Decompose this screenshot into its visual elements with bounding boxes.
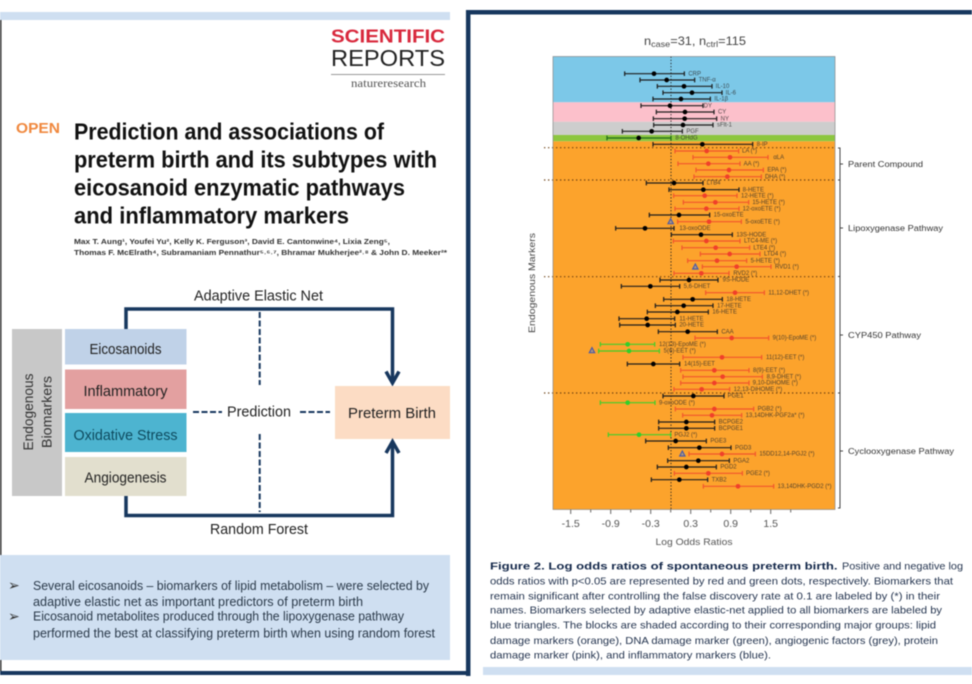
open access tag: OPEN <box>16 121 60 137</box>
lipoxygenase pathway markers: 15-HETE (*) <box>752 200 785 206</box>
bullet: lipoxygenase finding: performed the best at classifying preterm birth when using random forest <box>33 627 436 641</box>
box: preterm birth: Preterm Birth <box>348 406 436 422</box>
box: inflammatory <box>65 370 186 409</box>
lipoxygenase pathway markers <box>616 181 799 277</box>
box: preterm birth <box>335 386 450 439</box>
CYP450 pathway markers: 5,6-DHET <box>684 284 711 290</box>
chart heading: sample sizes: n <box>644 34 651 48</box>
pathway bracket and labels: CYP450 Pathway <box>848 330 922 340</box>
CYP450 pathway markers: 20-HETE <box>679 323 704 329</box>
DNA damage marker <box>607 136 698 142</box>
CYP450 pathway markers <box>589 278 816 393</box>
figure caption: Figure 2. Log odds ratios of spontaneous preterm birth. <box>490 560 838 572</box>
CYP450 pathway markers: 17-HETE <box>717 303 742 309</box>
lipoxygenase pathway markers: 12-HETE (*) <box>741 193 774 199</box>
lipoxygenase pathway markers: LTC4-ME (*) <box>744 239 777 245</box>
CYP450 pathway markers: 14(15)-EET <box>684 362 715 368</box>
figure caption: blue triangles. The blocks are shaded according to their corresponding major groups: lipid <box>490 619 936 631</box>
arrow: adaptive elastic net path to preterm birth <box>126 309 399 383</box>
x axis: -0.9 <box>602 518 620 530</box>
parent compound markers: DHA (*) <box>765 174 785 180</box>
chart heading: sample sizes: =31, n <box>670 34 706 48</box>
bullet: eicosanoids finding: Several eicosanoids – biomarkers of lipid metabolism – were selected by <box>33 579 430 593</box>
CYP450 pathway markers: 12,13-DiHOME (*) <box>734 387 782 393</box>
cyclooxygenase pathway markers: PGA2 <box>733 458 750 464</box>
parent compound markers: LA (*) <box>742 149 757 155</box>
figure caption: Positive and negative log <box>842 560 963 572</box>
parent compound markers: αLA <box>773 155 784 161</box>
flow diagram <box>12 289 450 538</box>
cyclooxygenase pathway markers: PGE3 <box>710 439 727 445</box>
box: inflammatory: Inflammatory <box>84 384 168 400</box>
panel: endogenous biomarkers: Endogenous <box>20 374 36 450</box>
cyclooxygenase pathway markers: 9-oxoODE (*) <box>659 400 695 406</box>
prediction label with dashed guides: Prediction <box>227 405 291 421</box>
parent compound markers: 8-IP <box>757 142 768 148</box>
x axis <box>562 510 791 530</box>
cyclooxygenase pathway markers: BCPGE1 <box>719 426 744 432</box>
box: oxidative stress <box>65 413 186 452</box>
CYP450 pathway markers: 11(12)-EET (*) <box>766 355 804 361</box>
CYP450 pathway markers: 9S-HODE <box>723 278 749 284</box>
figure caption: names. Biomarkers selected by adaptive elastic-net applied to all biomarkers are labeled by <box>490 604 943 616</box>
protein damage markers <box>641 103 729 122</box>
figure caption <box>490 560 963 661</box>
parent compound markers <box>653 142 787 180</box>
bullet: eicosanoids finding: adaptive elastic net as important predictors of preterm birth <box>33 595 363 609</box>
label: adaptive elastic net: Adaptive Elastic Net <box>194 289 323 305</box>
cyclooxygenase pathway markers: PGJ2 (*) <box>674 432 697 438</box>
cyclooxygenase pathway markers: PGB2 (*) <box>758 407 782 413</box>
cyclooxygenase pathway markers: 13,14DHK-PGD2 (*) <box>778 484 832 490</box>
figure caption: damage markers (orange), DNA damage marker (green), angiogenic factors (grey), protein <box>490 635 938 647</box>
journal logo: Scientific Reports <box>331 26 445 90</box>
parent compound markers: EPA (*) <box>767 168 787 174</box>
figure caption: damage marker (pink), and inflammatory markers (blue). <box>490 649 771 661</box>
cyclooxygenase pathway markers: PGE1 <box>728 394 744 400</box>
figure caption: remain significant after controlling the false discovery rate at 0.1 are labeled by (*) in their <box>490 590 941 602</box>
journal logo: Scientific Reports: SCIENTIFIC <box>331 26 445 47</box>
CYP450 pathway markers: 11,12-DHET (*) <box>768 290 809 296</box>
bullet: eicosanoids finding <box>8 578 430 609</box>
lipoxygenase pathway markers: 15-oxoETE <box>714 213 744 219</box>
CYP450 pathway markers: 5(6)-EET (*) <box>664 349 696 355</box>
lipoxygenase pathway markers: 8-HETE <box>743 187 764 193</box>
bullet: lipoxygenase finding <box>8 609 436 641</box>
CYP450 pathway markers: 16-HETE <box>712 310 737 316</box>
title: preterm birth and its subtypes with <box>74 147 437 173</box>
angiogenic factors: PGF <box>686 129 699 135</box>
cyclooxygenase pathway markers: 13,14DHK-PGF2a* (*) <box>746 413 805 419</box>
forest plot <box>544 56 835 510</box>
x axis: 0.9 <box>723 518 738 530</box>
cyclooxygenase pathway markers: TXB2 <box>712 477 727 483</box>
CYP450 pathway markers: 9(10)-EpoME (*) <box>773 336 816 342</box>
bullet: eicosanoids finding: ➢ <box>8 578 20 594</box>
panel: endogenous biomarkers <box>12 329 62 496</box>
y axis label: Endogenous Markers <box>527 232 537 333</box>
box: angiogenesis: Angiogenesis <box>84 471 166 487</box>
cyclooxygenase pathway markers: PGD2 <box>720 465 737 471</box>
journal logo: Scientific Reports: natureresearch <box>351 76 426 90</box>
angiogenic factors <box>622 123 733 135</box>
cyclooxygenase pathway markers: BCPGE2 <box>719 420 744 426</box>
protein damage markers: DY <box>704 103 712 109</box>
authors <box>74 239 447 257</box>
DNA damage marker: 8-OHdG <box>675 136 698 142</box>
inflammatory markers: CRP <box>688 71 701 77</box>
inflammatory markers <box>625 71 737 103</box>
prediction label with dashed guides <box>193 312 330 512</box>
x axis: 1.5 <box>763 518 778 530</box>
lipoxygenase pathway markers: 5-HETE (*) <box>751 258 780 264</box>
title: Prediction and associations of <box>74 118 384 144</box>
x axis label: Log Odds Ratios <box>656 537 733 548</box>
inflammatory markers: TNF-α <box>699 78 716 84</box>
cyclooxygenase pathway markers: PGE2 (*) <box>746 471 770 477</box>
panel: key findings <box>0 555 450 660</box>
pathway bracket and labels: Lipoxygenase Pathway <box>848 223 944 233</box>
box: oxidative stress: Oxidative Stress <box>74 428 178 444</box>
lipoxygenase pathway markers: 12-oxoETE (*) <box>743 206 781 212</box>
chart heading: sample sizes: ctrl <box>706 39 718 49</box>
lipoxygenase pathway markers: LTD4 (*) <box>764 252 786 258</box>
CYP450 pathway markers: 8,9-DHET (*) <box>767 374 801 380</box>
protein damage markers: CY <box>718 110 726 116</box>
authors: Max T. Aung¹, Youfei Yu², Kelly K. Ferguson³, David E. Cantonwine⁴, Lixia Zeng⁵, <box>74 239 390 246</box>
box: eicosanoids: Eicosanoids <box>90 342 162 358</box>
CYP450 pathway markers: 11-HETE <box>679 316 704 322</box>
journal logo: Scientific Reports: REPORTS <box>331 45 445 71</box>
inflammatory markers: IL-10 <box>716 84 730 90</box>
CYP450 pathway markers: 12(13)-EpoME (*) <box>659 342 706 348</box>
lipoxygenase pathway markers: RVD2 (*) <box>733 271 757 277</box>
bullet: lipoxygenase finding: ➢ <box>8 609 20 625</box>
chart heading: sample sizes: =115 <box>718 34 746 48</box>
inflammatory markers: IL-1β <box>714 97 729 103</box>
box: angiogenesis <box>65 457 186 496</box>
protein damage markers: NY <box>721 116 729 122</box>
angiogenic factors: sFlt-1 <box>717 123 733 129</box>
box: eicosanoids <box>65 329 186 364</box>
plot background blocks <box>553 56 835 510</box>
cyclooxygenase pathway markers: 15DD12,14-PGJ2 (*) <box>759 452 815 458</box>
cyclooxygenase pathway markers <box>600 394 832 490</box>
pathway bracket and labels <box>838 148 955 508</box>
title: and inflammatory markers <box>74 202 349 228</box>
lipoxygenase pathway markers: LTE4 (*) <box>753 245 775 251</box>
inflammatory markers: IL-6 <box>726 90 737 96</box>
CYP450 pathway markers: 18-HETE <box>726 297 751 303</box>
lipoxygenase pathway markers: 5-oxoETE (*) <box>745 219 780 225</box>
lipoxygenase pathway markers: 13-oxoODE <box>679 226 711 232</box>
pathway bracket and labels: Parent Compound <box>848 159 923 169</box>
x axis: 0.3 <box>683 518 698 530</box>
title: eicosanoid enzymatic pathways <box>74 174 405 200</box>
arrow: random forest path to preterm birth <box>126 442 399 516</box>
CYP450 pathway markers: 9,10-DiHOME (*) <box>753 381 798 387</box>
x axis: -0.3 <box>642 518 660 530</box>
CYP450 pathway markers: 8(9)-EET (*) <box>753 368 785 374</box>
lipoxygenase pathway markers: RVD1 (*) <box>775 264 799 270</box>
lipoxygenase pathway markers: 13S-HODE <box>736 232 766 238</box>
lipoxygenase pathway markers: LTB4 <box>707 181 721 187</box>
CYP450 pathway markers: CAA <box>721 329 734 335</box>
authors: Thomas F. McElrath⁴, Subramaniam Pennathur⁵˒⁶˒⁷, Bhramar Mukherjee²˒⁸ & John D. Meeker²* <box>74 250 447 257</box>
chart heading: sample sizes: case <box>651 39 671 49</box>
cyclooxygenase pathway markers: PGD3 <box>735 445 752 451</box>
figure caption: odds ratios with p<0.05 are represented by red and green dots, respectively. Biomarkers that <box>490 575 953 587</box>
bullet: lipoxygenase finding: Eicosanoid metabolites produced through the lipoxygenase pathway <box>33 610 405 624</box>
parent compound markers: AA (*) <box>744 161 759 167</box>
pathway bracket and labels: Cyclooxygenase Pathway <box>848 446 955 456</box>
title <box>74 118 437 228</box>
panel: endogenous biomarkers: Biomarkers <box>38 376 54 448</box>
label: random forest: Random Forest <box>210 522 308 538</box>
x axis: -1.5 <box>562 518 580 530</box>
